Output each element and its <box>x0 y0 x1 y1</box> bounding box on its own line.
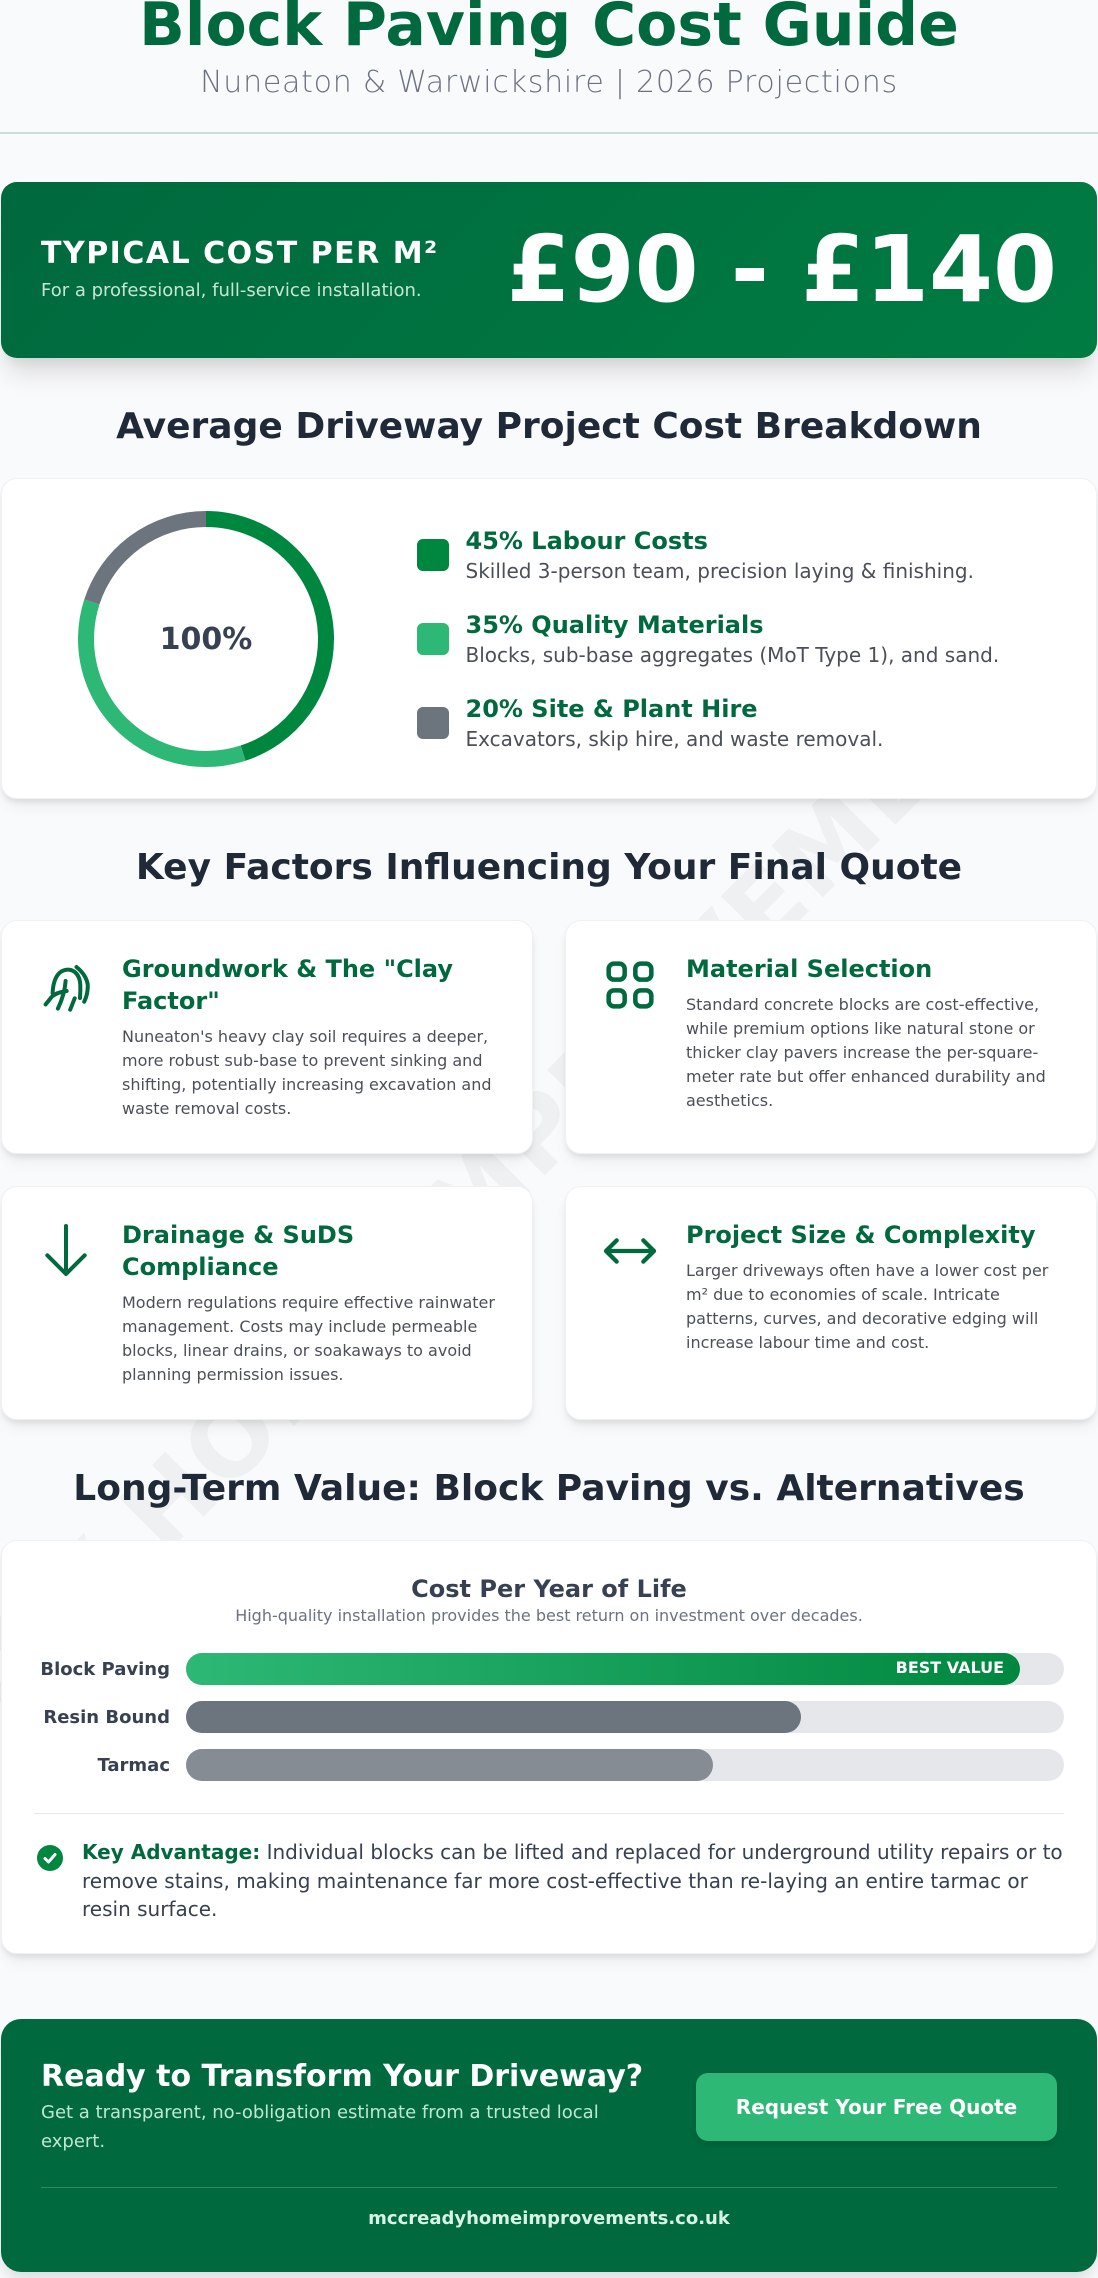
icon: fingerprint <box>44 964 90 1012</box>
card title: drainage: Drainage & SuDS <box>122 1221 354 1249</box>
card title: groundwork <box>122 955 453 1015</box>
bar: block paving: BEST VALUE <box>896 1658 1004 1677</box>
website: mccreadyhomeimprovements.co.uk <box>368 2208 730 2229</box>
legend swatch: site <box>417 707 449 739</box>
card text: drainage: Modern regulations require effective rainwater <box>122 1293 495 1312</box>
card text: material selection <box>686 995 1046 1110</box>
card text: project size: patterns, curves, and decorative edging will <box>686 1309 1038 1328</box>
legend title: materials: 35% Quality Materials <box>466 611 764 639</box>
panel: cost breakdown <box>1 478 1097 799</box>
key advantage text: remove stains, making maintenance far more cost-effective than re-laying an entire tarmac or <box>82 1868 1028 1892</box>
card text: groundwork: more robust sub-base to prevent sinking and <box>122 1051 482 1070</box>
card title: groundwork: Groundwork & The "Clay <box>122 955 453 983</box>
panel: call to action <box>1 2019 1097 2272</box>
legend title: site: 20% Site & Plant Hire <box>466 695 758 723</box>
card title: groundwork: Factor" <box>122 987 220 1015</box>
card text: material selection: Standard concrete blocks are cost-effective, <box>686 995 1039 1014</box>
donut chart <box>78 511 334 767</box>
card title: material selection: Material Selection <box>686 955 932 983</box>
cta text <box>41 2102 599 2152</box>
cta button: Request Your Free Quote <box>736 2095 1017 2119</box>
panel: drainage <box>1 1186 533 1420</box>
card text: project size <box>686 1261 1048 1352</box>
panel: project size <box>565 1186 1097 1420</box>
card title: drainage <box>122 1221 354 1281</box>
key advantage text: Key Advantage: Individual blocks can be lifted and replaced for underground utility repairs or to <box>82 1840 1063 1864</box>
panel: material selection <box>565 920 1097 1154</box>
donut chart: 100% <box>160 622 252 657</box>
subtitle: Nuneaton & Warwickshire | 2026 Projections <box>200 65 898 100</box>
bar: tarmac <box>97 1749 1064 1781</box>
heading: key factors: Key Factors Influencing Your Final Quote <box>136 847 962 888</box>
hero price: £90 - £140 <box>507 216 1057 323</box>
bar: tarmac: Tarmac <box>97 1755 170 1776</box>
panel: groundwork <box>1 920 533 1154</box>
card text: groundwork: shifting, potentially increasing excavation and <box>122 1075 492 1094</box>
panel: long-term value <box>1 1540 1097 1954</box>
icon: arrow down <box>45 1224 87 1276</box>
legend text: labour: Skilled 3-person team, precision laying & finishing. <box>466 559 974 583</box>
bar: resin bound <box>43 1701 1064 1733</box>
card text: drainage <box>122 1293 495 1384</box>
card text: material selection: thicker clay pavers increase the per-square- <box>686 1043 1038 1062</box>
card text: groundwork <box>122 1027 492 1118</box>
card text: groundwork: waste removal costs. <box>122 1099 291 1118</box>
chart title: Cost Per Year of Life <box>411 1575 687 1603</box>
heading: long-term value: Long-Term Value: Block Paving vs. Alternatives <box>73 1468 1025 1509</box>
legend swatch: labour <box>417 539 449 571</box>
card text: project size: m² due to economies of scale. Intricate <box>686 1285 1000 1304</box>
chart subtitle: High-quality installation provides the best return on investment over decades. <box>235 1606 863 1625</box>
key advantage text <box>82 1840 1063 1921</box>
legend text: site: Excavators, skip hire, and waste removal. <box>466 727 883 751</box>
heading: cost breakdown: Average Driveway Project Cost Breakdown <box>116 406 982 447</box>
bar: resin bound: Resin Bound <box>43 1707 170 1728</box>
icon: double arrow <box>604 1238 656 1264</box>
icon: grid <box>606 961 654 1009</box>
card text: drainage: management. Costs may include permeable <box>122 1317 477 1336</box>
legend swatch: materials <box>417 623 449 655</box>
cta text: Get a transparent, no-obligation estimate from a trusted local <box>41 2102 599 2123</box>
card text: material selection: aesthetics. <box>686 1091 773 1110</box>
hero note: For a professional, full-service installation. <box>41 280 422 301</box>
card text: material selection: meter rate but offer enhanced durability and <box>686 1067 1046 1086</box>
bar chart <box>40 1653 1064 1781</box>
card text: material selection: while premium options like natural stone or <box>686 1019 1035 1038</box>
card text: project size: increase labour time and cost. <box>686 1333 929 1352</box>
cta button <box>696 2073 1057 2141</box>
cta title: Ready to Transform Your Driveway? <box>41 2059 643 2094</box>
cta text: expert. <box>41 2130 105 2152</box>
card title: project size: Project Size & Complexity <box>686 1221 1036 1249</box>
legend text: materials: Blocks, sub-base aggregates (MoT Type 1), and sand. <box>466 643 999 667</box>
hero label: TYPICAL COST PER M² <box>41 236 439 271</box>
card text: drainage: blocks, linear drains, or soakaways to avoid <box>122 1341 472 1360</box>
card text: project size: Larger driveways often have a lower cost per <box>686 1261 1048 1280</box>
legend title: labour: 45% Labour Costs <box>466 527 708 555</box>
card text: groundwork: Nuneaton's heavy clay soil requires a deeper, <box>122 1027 488 1046</box>
key advantage text: resin surface. <box>82 1897 217 1921</box>
card title: drainage: Compliance <box>122 1253 279 1281</box>
bar: block paving: Block Paving <box>40 1659 170 1680</box>
icon: check <box>37 1845 63 1871</box>
card text: drainage: planning permission issues. <box>122 1365 344 1384</box>
panel: typical cost hero <box>1 182 1097 358</box>
bar: block paving <box>40 1653 1064 1685</box>
